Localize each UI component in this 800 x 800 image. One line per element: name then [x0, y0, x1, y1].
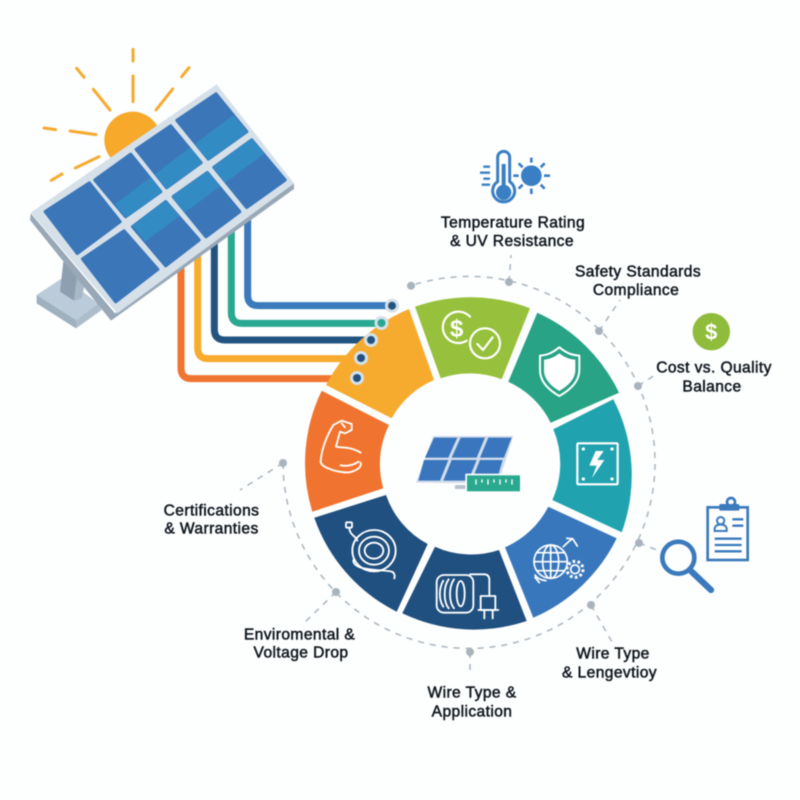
segment: navy coil [314, 495, 428, 612]
label: safety standards: Safety Standards [575, 264, 701, 280]
label: safety standards: Compliance [593, 282, 679, 299]
center icon: panel and charge strip [416, 436, 521, 493]
icon: spool and plug [437, 574, 498, 618]
bright reflection band on cells [115, 115, 265, 242]
solar panel illustration with sun, stand and wires [30, 49, 392, 379]
sun rays [44, 49, 189, 180]
icon: shield [540, 347, 579, 396]
icon: power box [577, 443, 618, 484]
label: cost vs quality: Balance [682, 378, 742, 396]
label: temperature rating: & UV Resistance [450, 233, 574, 250]
sun [104, 112, 161, 168]
label: environmental and voltage drop: Enviromental & [244, 626, 355, 644]
icon: clipboard and magnifier [662, 498, 748, 590]
segment: green [415, 297, 530, 379]
icon: globe and gear [534, 538, 583, 583]
segment: emerald [508, 313, 619, 423]
icon: dollar coin [693, 313, 730, 350]
segment: yellow [326, 309, 434, 418]
label: wire type and application: Wire Type & [427, 684, 517, 702]
segment: teal [552, 399, 632, 532]
label: environmental and voltage drop: Voltage Drop [254, 644, 348, 662]
segmented wheel [305, 297, 632, 630]
label: cost vs quality: Cost vs. Quality [656, 360, 772, 376]
label: wire type and longevity: & Lengevtioy [562, 664, 657, 682]
icon: wire coil [346, 522, 396, 578]
icon: thermometer and sun [480, 151, 550, 202]
label: temperature rating: Temperature Rating [441, 214, 585, 232]
segment: navy spool [402, 547, 527, 630]
panel stand [37, 262, 102, 328]
icon: dollar and check: $ [450, 316, 463, 343]
icon: dollar coin: $ [705, 320, 717, 344]
panel cells [45, 94, 285, 302]
segment: orange [305, 391, 389, 512]
icon: dollar and check [443, 312, 500, 358]
wire terminal dots [350, 299, 399, 385]
panel frame [30, 84, 294, 321]
wheel icons [321, 312, 618, 618]
icon: flexed arm [321, 421, 361, 472]
dashed connector ring [240, 255, 657, 672]
segment: blue [505, 507, 617, 618]
label: certifications: Certifications [164, 502, 259, 520]
label: wire type and longevity: Wire Type [576, 646, 650, 662]
wires [181, 207, 392, 379]
label: wire type and application: Application [432, 704, 512, 720]
label: certifications: & Warranties [164, 520, 259, 538]
